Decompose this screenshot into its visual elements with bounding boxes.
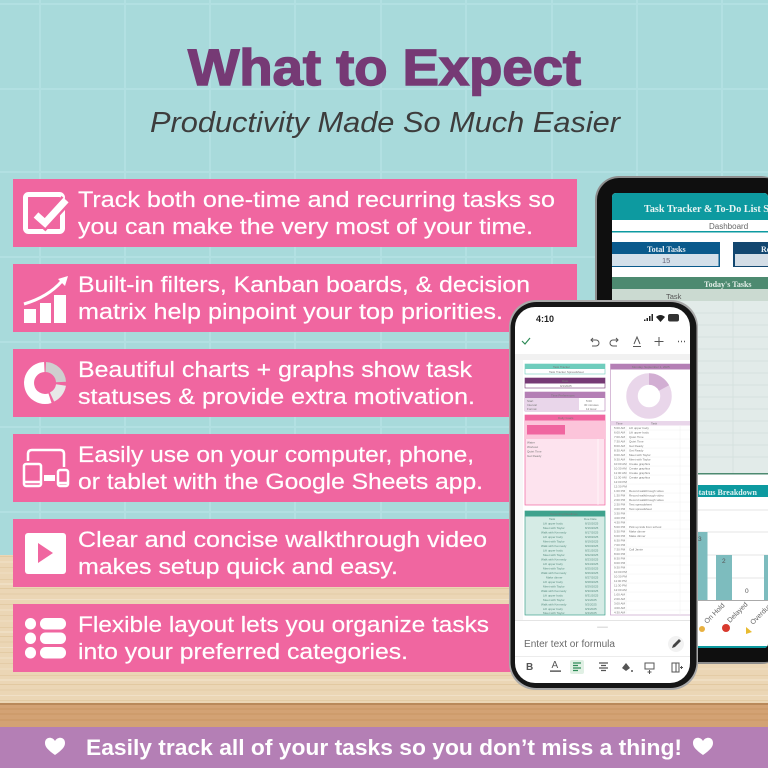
sheet block: upcoming deadlines: Lift upper body (543, 548, 563, 552)
text: charts and graphs (78, 357, 475, 409)
icon: computer tablet phone (24, 450, 68, 486)
tablet mockup (595, 176, 768, 664)
subtitle: Productivity Made So Much Easier (150, 107, 621, 139)
sheet block: upcoming deadlines: Meet with Taylor (543, 526, 565, 530)
sheet block: title: Task Tracker (553, 365, 570, 369)
schedule rows: 4:30 AM (614, 610, 626, 614)
status breakdown chart: 3 (698, 536, 702, 543)
sheet block: title (525, 364, 605, 374)
schedule rows: 8:30 AM (614, 448, 626, 452)
text: flexible layout: Flexible layout lets you organize tasks (78, 612, 489, 637)
schedule rows: Make dinner (629, 534, 646, 538)
status breakdown chart: Delayed (726, 601, 750, 624)
sheet block: upcoming deadlines: Task (549, 517, 556, 521)
tablet screen: dashboard (610, 193, 768, 648)
sheet block: upcoming deadlines: 8/27/2025 (585, 576, 599, 580)
schedule rows: 7:00 PM (614, 543, 626, 547)
schedule rows: 9:30 PM (614, 566, 626, 570)
schedule rows: 10:30 AM (614, 466, 627, 470)
schedule rows: Create graphics (629, 471, 651, 475)
stat card: remaining (733, 242, 768, 267)
editing toolbar (522, 337, 685, 346)
icon: heart right (693, 738, 713, 755)
sheet block: upcoming deadlines: Meet with Taylor (543, 598, 565, 602)
schedule rows: 12:00 AM (614, 588, 627, 592)
spreadsheet header: Dashboard (709, 222, 748, 231)
sheet block: upcoming deadlines: Meet with Taylor (543, 584, 565, 588)
stat card: total tasks: 15 (662, 256, 670, 265)
formatting toolbar (515, 656, 690, 674)
schedule rows: 8:30 PM (614, 556, 626, 560)
sheet block: upcoming deadlines: Walk with Kennedy (541, 530, 567, 534)
schedule rows: 7:00 AM (614, 435, 626, 439)
status breakdown chart: Task Status Breakdown (676, 488, 758, 497)
status breakdown chart: 0 (745, 588, 749, 595)
sheet block: upcoming deadlines: Walk with Kennedy (541, 589, 567, 593)
sheet block: time preferences (525, 392, 605, 411)
sheet block: upcoming deadlines: 8/16/2025 (585, 526, 599, 530)
schedule rows: 2:00 AM (614, 597, 626, 601)
schedule rows: 11:00 PM (614, 579, 627, 583)
sheet block: upcoming deadlines: 8/23/2025 (585, 558, 599, 562)
schedule rows: 6:00 AM (614, 430, 626, 434)
sheet block: upcoming deadlines: Meet with Taylor (543, 566, 565, 570)
sheet block: upcoming deadlines: 9/2/2025 (585, 602, 597, 606)
schedule rows: 3:00 AM (614, 602, 626, 606)
sheet block: upcoming deadlines: 8/17/2025 (585, 530, 599, 534)
sheet block: upcoming deadlines: Lift upper body (543, 607, 563, 611)
sheet block: upcoming deadlines: 8/30/2025 (585, 589, 599, 593)
sheet block: upcoming deadlines: Lift upper body (543, 594, 563, 598)
schedule rows: Record walkthrough video (629, 494, 664, 498)
sheet block: upcoming deadlines: Walk with Kennedy (541, 558, 567, 562)
schedule rows: 2:00 PM (614, 498, 626, 502)
sheet block: title: Task Tracker Spreadsheet (549, 370, 584, 374)
donut chart (632, 379, 666, 413)
schedule rows (610, 421, 690, 615)
sheet block: daily goals: Water (527, 440, 535, 444)
sheet block: daily schedule (610, 364, 690, 615)
text: filters and kanban (78, 272, 530, 324)
schedule rows: 4:00 PM (614, 516, 626, 520)
schedule rows: 11:00 AM (614, 471, 627, 475)
text: devices (78, 442, 483, 494)
sheet block: upcoming deadlines: Upcoming Deadlines (550, 512, 578, 516)
icon: donut chart (29, 367, 61, 399)
sheet block: date: 9/1/2025 (560, 384, 572, 388)
schedule rows: 2:30 PM (614, 502, 626, 506)
status bar: 4:10 (536, 314, 554, 324)
sheet block: upcoming deadlines: 8/18/2025 (585, 535, 599, 539)
schedule rows: 9:30 AM (614, 458, 626, 462)
schedule rows: 4:30 PM (614, 520, 626, 524)
formula bar: Enter text or formula (524, 639, 615, 650)
sheet block: time preferences: 12 Hour (586, 407, 597, 411)
sheet block: daily goals: Daily Goals (558, 416, 574, 420)
sheet block: upcoming deadlines: Meet with Taylor (543, 540, 565, 544)
sheet block: upcoming deadlines: 8/21/2025 (585, 548, 599, 552)
sheet block: daily goals: Get Ready (527, 454, 542, 458)
status breakdown chart: On Hold (703, 602, 727, 625)
schedule rows: 8:00 PM (614, 552, 626, 556)
icon: checkbox (26, 194, 66, 232)
schedule rows: 5:00 PM (614, 525, 626, 529)
sheet block: upcoming deadlines: 9/4/2025 (585, 611, 597, 615)
sheet block: upcoming deadlines: Due Date (584, 517, 597, 521)
formula bar (515, 620, 690, 652)
schedule rows: Call Jamie (629, 548, 643, 552)
icon: rising bar chart (24, 276, 68, 323)
schedule rows: 11:30 AM (614, 476, 627, 480)
text: flexible layout: into your preferred categories. (78, 639, 408, 664)
panel: charts and graphs (13, 349, 577, 417)
schedule rows: 1:30 PM (614, 494, 626, 498)
text: flexible layout (78, 612, 489, 664)
schedule rows: Quiet Time (629, 440, 644, 444)
schedule rows: 12:00 PM (614, 480, 627, 484)
text: track tasks: Track both one-time and recurring tasks so (78, 187, 555, 212)
sheet block: upcoming deadlines: 8/29/2025 (585, 584, 599, 588)
sheet block: upcoming deadlines: 8/28/2025 (585, 580, 599, 584)
icon: heart left (45, 738, 65, 755)
phone mockup (509, 300, 698, 690)
text: walkthrough video (78, 527, 487, 579)
schedule rows: Task (651, 421, 658, 425)
today's tasks table: Task (666, 292, 682, 301)
schedule rows: Create graphics (629, 462, 651, 466)
schedule rows: 5:00 AM (614, 426, 626, 430)
schedule rows: 1:00 PM (614, 489, 626, 493)
formatting toolbar: B (526, 662, 533, 673)
schedule rows: 10:30 PM (614, 574, 627, 578)
sheet block: upcoming deadlines: 8/20/2025 (585, 544, 599, 548)
sheet block: upcoming deadlines: Meet with Taylor (543, 611, 565, 615)
text: charts and graphs: statuses & provide extra motivation. (78, 384, 475, 409)
sheet block: upcoming deadlines: Meet with Taylor (543, 553, 565, 557)
schedule rows: Quiet Time (629, 435, 644, 439)
text: filters and kanban: matrix help pinpoint your top priorities. (78, 299, 503, 324)
schedule rows: Create graphics (629, 476, 651, 480)
sheet column and row headers (515, 354, 690, 360)
schedule rows: Pick up kids from school (629, 525, 662, 529)
formatting toolbar: A (552, 660, 558, 671)
schedule rows: Test spreadsheet (629, 507, 652, 511)
text: charts and graphs: Beautiful charts + graphs show task (78, 357, 473, 382)
bottom banner (0, 727, 768, 768)
schedule rows: 10:00 AM (614, 462, 627, 466)
panel: track tasks (13, 179, 577, 247)
panel: devices (13, 434, 577, 502)
sheet block: upcoming deadlines: Walk with Kennedy (541, 544, 567, 548)
status bar (536, 314, 679, 322)
schedule rows: 7:30 AM (614, 440, 626, 444)
schedule rows: 6:00 PM (614, 534, 626, 538)
phone screen (515, 307, 690, 683)
schedule rows: 3:00 PM (614, 507, 626, 511)
sheet block: time preferences: Time Preferences (551, 394, 575, 398)
schedule rows: Get Ready (629, 444, 644, 448)
sheet block: upcoming deadlines: Walk with Kennedy (541, 571, 567, 575)
sheet block: upcoming deadlines: 8/22/2025 (585, 553, 599, 557)
sheet block: upcoming deadlines: Lift upper body (543, 522, 563, 526)
sheet block: daily goals: Quiet Time (527, 450, 542, 454)
spreadsheet header (612, 193, 768, 232)
sheet block: time preferences: 5:00 (586, 399, 592, 403)
icon: play button (25, 533, 66, 574)
sheet block: upcoming deadlines (525, 511, 605, 615)
title: What to Expect (188, 39, 581, 96)
sheet block: time preferences: Format (527, 407, 537, 411)
text: filters and kanban: Built-in filters, Kanban boards, & decision (78, 272, 530, 297)
text: walkthrough video: makes setup quick and easy. (78, 554, 398, 579)
panel: walkthrough video (13, 519, 577, 587)
wooden table (0, 555, 768, 727)
schedule rows: 6:30 PM (614, 538, 626, 542)
schedule rows: Make dinner (629, 530, 646, 534)
schedule rows: 11:30 PM (614, 584, 627, 588)
schedule rows: 3:30 PM (614, 512, 626, 516)
icon: list layout (25, 618, 66, 658)
teal grid background (0, 0, 768, 560)
schedule rows: 4:00 AM (614, 606, 626, 610)
schedule rows: 8:00 AM (614, 444, 626, 448)
text: track tasks: you can make the very most of your time. (78, 214, 533, 239)
schedule rows: 5:30 PM (614, 530, 626, 534)
status breakdown chart: 2 (722, 558, 726, 565)
schedule rows: 1:00 AM (614, 592, 626, 596)
schedule rows: 7:30 PM (614, 548, 626, 552)
sheet block: upcoming deadlines: 8/25/2025 (585, 566, 599, 570)
text: track tasks (78, 187, 555, 239)
today's tasks table (612, 277, 768, 474)
panel: filters and kanban (13, 264, 577, 332)
schedule rows: Get Ready (629, 448, 644, 452)
sheet block: upcoming deadlines: 8/31/2025 (585, 594, 599, 598)
schedule rows: 9:00 PM (614, 561, 626, 565)
schedule rows: Lift upper body (629, 426, 649, 430)
schedule rows: 9:00 AM (614, 453, 626, 457)
sheet block: date: Date (562, 379, 569, 383)
sheet block: upcoming deadlines: 9/3/2025 (585, 607, 597, 611)
sheet block: upcoming deadlines: Make dinner (546, 576, 563, 580)
sheet block: upcoming deadlines: 8/26/2025 (585, 571, 599, 575)
schedule rows: Lift upper body (629, 430, 649, 434)
sheet block: upcoming deadlines: Lift upper body (543, 562, 563, 566)
sheet block: time preferences: Interval (527, 403, 537, 407)
sheet block: upcoming deadlines: 8/15/2025 (585, 522, 599, 526)
schedule rows: Create graphics (629, 466, 651, 470)
sheet block: daily goals: Workout (527, 445, 538, 449)
text: devices: or tablet with the Google Sheets app. (78, 469, 483, 494)
schedule rows: 10:00 PM (614, 570, 627, 574)
schedule rows: Meet with Taylor (629, 458, 651, 462)
today's tasks table: Today's Tasks (704, 280, 752, 289)
sheet block: upcoming deadlines: 8/24/2025 (585, 562, 599, 566)
panel: flexible layout (13, 604, 577, 672)
schedule rows: Test spreadsheet (629, 502, 652, 506)
schedule rows: Record walkthrough video (629, 489, 664, 493)
sheet block: date (525, 378, 605, 388)
banner text: Easily track all of your tasks so you don’t miss a thing! (86, 735, 682, 760)
stat card: total tasks (610, 242, 720, 267)
stat card: total tasks: Total Tasks (647, 245, 686, 254)
schedule rows: Time (616, 421, 623, 425)
sheet block: upcoming deadlines: 8/19/2025 (585, 540, 599, 544)
text: walkthrough video: Clear and concise walkthrough video (78, 527, 487, 552)
sheet block: upcoming deadlines: Lift upper body (543, 580, 563, 584)
schedule rows: Meet with Taylor (629, 453, 651, 457)
sheet block: upcoming deadlines: Walk with Kennedy (541, 602, 567, 606)
sheet block: daily schedule: Monday, September 1, 2025 (632, 365, 670, 369)
sheet block: upcoming deadlines: 9/1/2025 (585, 598, 597, 602)
schedule rows: 12:30 PM (614, 484, 627, 488)
schedule rows: Record walkthrough video (629, 498, 664, 502)
sheet block: upcoming deadlines: Lift upper body (543, 535, 563, 539)
sheet block: time preferences: 30 minutes (584, 403, 599, 407)
status breakdown chart (698, 485, 768, 648)
text: devices: Easily use on your computer, phone, (78, 442, 474, 467)
sheet block: time preferences: Start (527, 399, 534, 403)
sheet block: daily goals (525, 415, 605, 505)
